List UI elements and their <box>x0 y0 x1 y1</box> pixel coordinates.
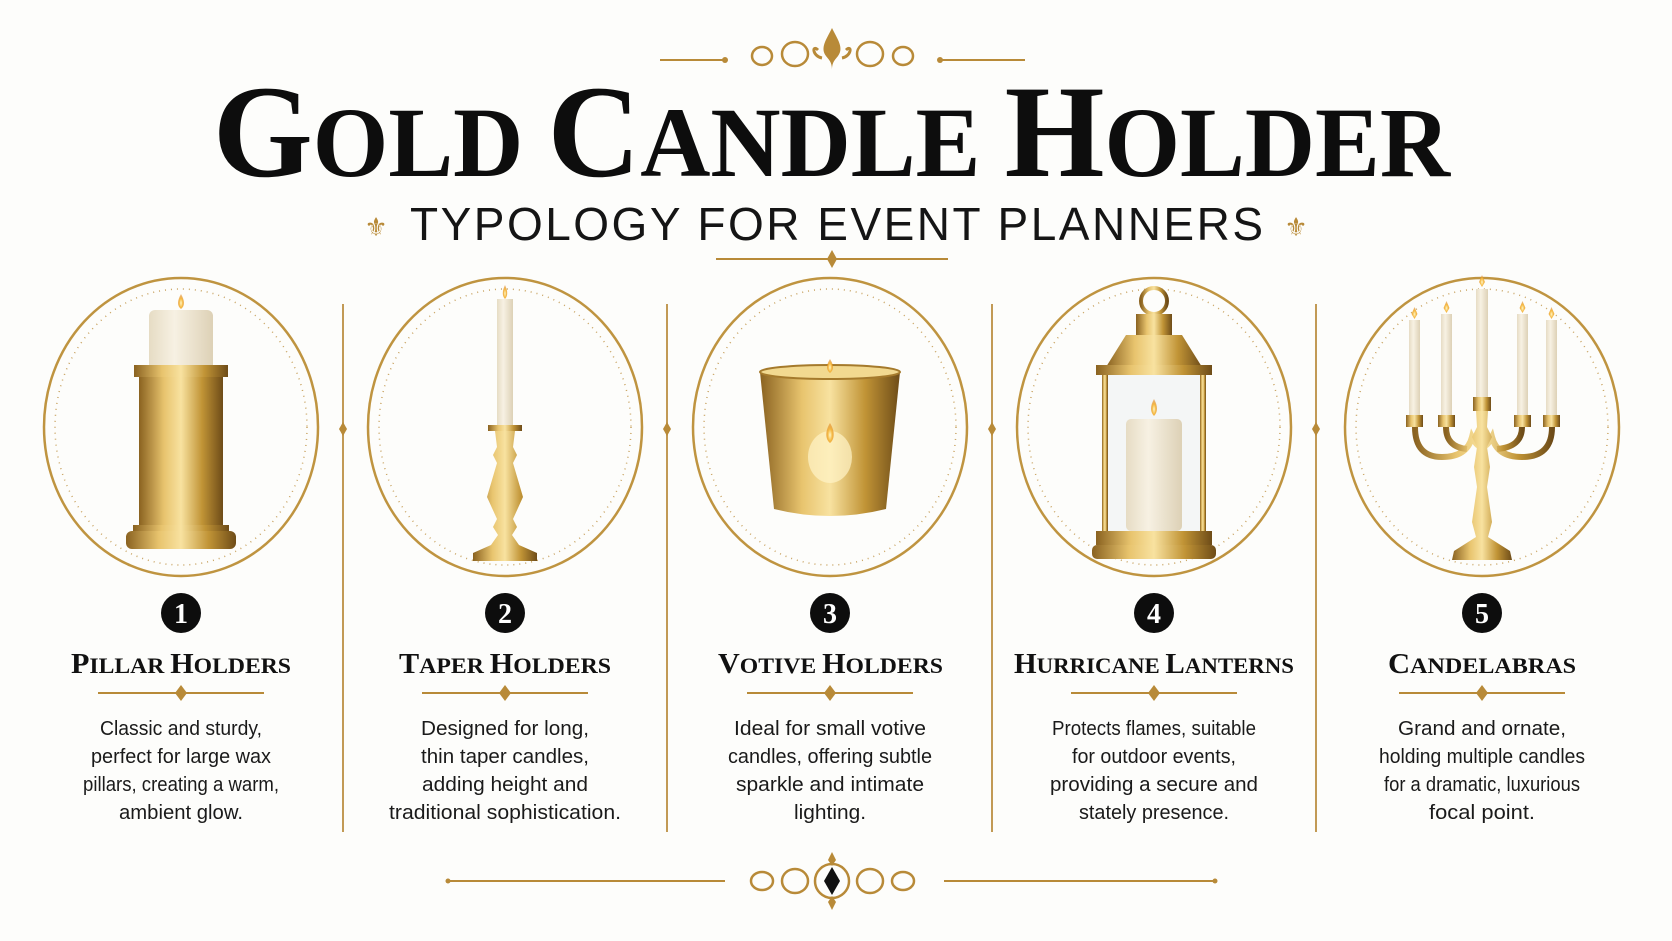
panel: taper holders <box>368 278 642 824</box>
heading: VOTIVE HOLDERS <box>718 649 943 680</box>
panel: pillar holders <box>44 278 318 824</box>
subtitle: ⚜ <box>364 213 388 243</box>
panel: hurricane lanterns <box>1014 278 1294 824</box>
heading divider <box>747 685 913 701</box>
frame <box>368 278 642 576</box>
description: adding height and <box>422 774 588 796</box>
number badge: 5 <box>1475 599 1489 630</box>
description: perfect for large wax <box>91 746 271 768</box>
description: holding multiple candles <box>1379 746 1585 768</box>
column dividers <box>343 304 1316 832</box>
description: traditional sophistication. <box>389 802 621 824</box>
number badge <box>1134 593 1174 633</box>
number badge: 3 <box>823 599 837 630</box>
description: sparkle and intimate <box>736 774 924 796</box>
panel: votive holders <box>693 278 967 824</box>
heading divider <box>1071 685 1237 701</box>
frame <box>693 278 967 576</box>
title: GOLD CANDLE HOLDER <box>213 58 1452 205</box>
description: candles, offering subtle <box>728 746 932 768</box>
number badge <box>1462 593 1502 633</box>
description: Designed for long, <box>421 718 589 740</box>
subtitle divider <box>716 250 948 268</box>
frame <box>44 278 318 576</box>
description: for outdoor events, <box>1072 746 1236 768</box>
description: Classic and sturdy, <box>100 718 262 740</box>
heading divider <box>1399 685 1565 701</box>
description: providing a secure and <box>1050 774 1258 796</box>
subtitle: ⚜ <box>1284 213 1308 243</box>
description: Ideal for small votive <box>734 718 926 740</box>
heading: TAPER HOLDERS <box>399 649 611 680</box>
number badge: 2 <box>498 599 512 630</box>
heading: PILLAR HOLDERS <box>71 649 291 680</box>
description: ambient glow. <box>119 802 243 824</box>
frame <box>1345 278 1619 576</box>
top ornament <box>660 28 1025 70</box>
subtitle: TYPOLOGY FOR EVENT PLANNERS <box>410 198 1263 250</box>
description: Protects flames, suitable <box>1052 718 1256 740</box>
description: thin taper candles, <box>421 746 589 768</box>
description: lighting. <box>794 802 866 824</box>
number badge: 1 <box>174 599 188 630</box>
icon: candelabra <box>1406 275 1560 560</box>
description: stately presence. <box>1079 802 1229 824</box>
bottom ornament <box>446 852 1218 910</box>
icon: taper candlestick <box>473 285 537 561</box>
number badge <box>485 593 525 633</box>
icon: lantern <box>1092 288 1216 559</box>
description: Grand and ornate, <box>1398 718 1566 740</box>
heading: CANDELABRAS <box>1388 649 1576 680</box>
number badge <box>161 593 201 633</box>
heading divider <box>98 685 264 701</box>
heading: HURRICANE LANTERNS <box>1014 649 1294 680</box>
icon: pillar candle holder <box>126 294 236 549</box>
panel: candelabras <box>1345 275 1619 824</box>
icon: votive glass <box>760 359 900 516</box>
frame <box>1017 278 1291 576</box>
number badge <box>810 593 850 633</box>
description: pillars, creating a warm, <box>83 774 279 796</box>
description: focal point. <box>1429 802 1535 824</box>
number badge: 4 <box>1147 599 1161 630</box>
heading divider <box>422 685 588 701</box>
description: for a dramatic, luxurious <box>1384 774 1580 796</box>
